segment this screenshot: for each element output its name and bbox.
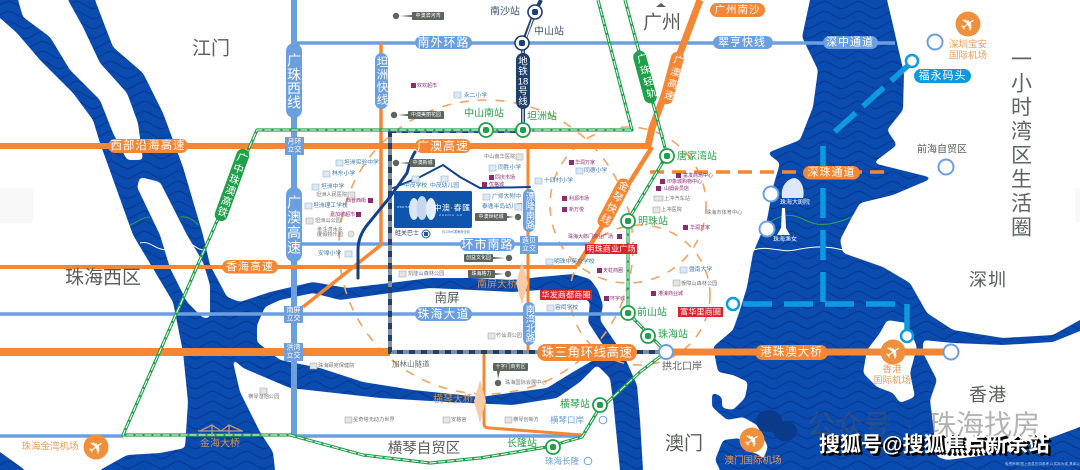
station labels: 中山站 <box>534 24 564 38</box>
grey POI labels: parks and hospitals: 坦洲山公园 <box>315 216 341 224</box>
purple POI labels: shopping: 山姆会员店 <box>664 185 689 192</box>
purple POI labels: shopping: 天虹商圈 <box>603 267 623 274</box>
interchange tags: 立交 <box>286 313 300 322</box>
bridge labels: 金海大桥 <box>200 436 240 450</box>
place name: hong kong: 香港 <box>969 385 1007 405</box>
blue POI labels: schools: 坦洲理工学校 <box>313 201 348 209</box>
interchange tags: 月环 <box>288 138 302 146</box>
interchange tags: 立交 <box>288 144 302 154</box>
station labels: 珠海长隆 <box>545 456 580 466</box>
place name: jiangmen: 江门 <box>192 38 230 60</box>
metro 18 pill: 线 <box>518 96 528 108</box>
blue POI labels: schools: 明珠中英文学校 <box>554 257 595 265</box>
station labels: 唐家湾站 <box>677 150 717 162</box>
place name: qianhai: 前海自贸区 <box>917 142 967 156</box>
grey POI icons <box>260 154 680 423</box>
interchange tags <box>284 137 538 361</box>
blue POI labels: schools: 同胜小学 <box>498 163 521 171</box>
project block: ZHONG AO <box>439 213 463 217</box>
shenzhen-zhuhai dashed link <box>650 170 890 174</box>
bridge labels <box>200 278 517 450</box>
bridge labels: 横琴大桥 <box>433 392 473 406</box>
wechat watermark icon <box>756 410 797 441</box>
road pills: orange <box>108 3 860 361</box>
station labels: 前山站 <box>637 306 667 318</box>
navy metro rail line <box>390 0 660 352</box>
grey POI labels: parks and hospitals: 上冲汽车站 <box>664 194 690 202</box>
grey POI labels: parks and hospitals: 横琴创新方 <box>513 415 539 423</box>
watermark: wechat account: 公众号 <box>807 410 891 440</box>
grey POI labels: parks and hospitals: 横琴湿地公园 <box>248 392 279 400</box>
grey POI labels: parks and hospitals: 竹仙洞公园 <box>496 331 522 339</box>
dark location tags: 十字门商务区 <box>495 363 526 370</box>
road pills: blue: 漂隆南路 <box>524 191 535 230</box>
road pills: blue: 珠海大道 <box>417 306 470 321</box>
blue POI labels: schools: 永二小学 <box>464 91 487 99</box>
blue POI labels: schools: 坦洲中学 <box>321 182 344 190</box>
shopping icons <box>356 83 688 301</box>
landmark: zhuhai grand theatre <box>780 178 810 206</box>
interchange tags: 造贝 <box>522 236 536 244</box>
grey POI labels: parks and hospitals <box>248 152 742 423</box>
place name: guangzhou <box>643 3 681 34</box>
place name: macau: 澳门 <box>665 432 703 454</box>
wavy rail and coast lines in water <box>130 215 852 251</box>
bridge labels: 南屏大桥 <box>477 278 517 290</box>
airports: 香港 <box>882 364 902 376</box>
cyan ring markers <box>727 55 918 342</box>
blue POI labels: schools: 中茂幼儿园 <box>430 181 459 189</box>
airports: ✈ <box>956 11 981 38</box>
metro 18 pill: 18 <box>518 76 528 88</box>
blue POI labels: schools: 中茂学校 <box>404 181 427 189</box>
station labels: 明珠站 <box>638 214 668 228</box>
bus stop label <box>395 229 470 238</box>
station glyphs green <box>483 127 670 450</box>
purple POI labels: shopping: 同庆市场 <box>495 174 515 181</box>
red commercial tags: 富华里商圈 <box>680 306 721 316</box>
purple POI labels: shopping: 利源市场 <box>569 195 589 202</box>
interchange tags: 立交 <box>286 350 300 360</box>
dark location tags: 中澳新城 <box>412 159 433 166</box>
project block: CHUN HUI <box>397 206 409 209</box>
station labels: 珠海站 <box>658 328 688 340</box>
grey POI labels: parks and hospitals: 凯隆山森林公园 <box>408 269 444 277</box>
road pills: orange: 西部沿海高速 <box>110 138 186 152</box>
dashed orange ring: tangjia <box>550 127 706 283</box>
road pills: blue: 深中通道 <box>826 34 874 48</box>
airports: ✈ <box>84 434 109 461</box>
diagonal pill: jinqin expressway: 金琴快线 <box>597 177 631 228</box>
blue POI labels: schools: 暨南大学 <box>689 265 712 273</box>
watermark: sohu shadow and text: 搜狐号@搜狐焦点新余站 <box>820 434 1051 458</box>
dark location tags: 创益文化园 <box>466 254 491 261</box>
watermark: wechat account: · <box>905 410 914 440</box>
bus stop label: 蛙关巴士 <box>395 229 419 237</box>
road pills: orange: 广澳高速 <box>417 138 469 153</box>
landmark: fisher girl statue <box>773 208 797 243</box>
airports: 国际机场 <box>949 50 987 62</box>
stations navy <box>515 5 542 50</box>
purple POI labels: shopping: 优格城 <box>489 181 504 188</box>
blue roads <box>0 0 895 436</box>
grey POI labels: parks and hospitals: 金斗湾水乡 <box>317 225 343 233</box>
blue POI labels: schools: 泰逸半岛幼儿园 <box>482 202 523 210</box>
interchange tags: 立交 <box>522 244 536 252</box>
watermark: sohu shadow and text: 搜狐号@搜狐焦点新余站 <box>822 435 1052 459</box>
purple POI labels: shopping: 新万悦 <box>569 206 584 213</box>
purple POI labels: shopping: 华润万家 <box>690 224 710 231</box>
dark location tags: 中澳世纪城 <box>478 213 504 220</box>
road pills: orange: 港珠澳大桥 <box>760 344 823 358</box>
airports: 澳门国际机场 <box>724 454 782 466</box>
dark location tags: 中澳美丽花园 <box>411 111 441 118</box>
dashed orange ring: community radius <box>339 100 633 394</box>
purple POI labels: shopping: 环宇城 <box>610 295 625 302</box>
purple POI labels: shopping: 珠海大郎门商业广场 <box>568 233 613 240</box>
place name: guangzhou: 广州 <box>643 12 681 34</box>
grey POI labels: parks and hospitals: 上冲医院 <box>661 205 683 213</box>
place name: hengqin: 横琴自贸区 <box>388 440 460 457</box>
purple POI labels: shopping: 港濠商业城 <box>658 290 683 297</box>
blue ring markers <box>584 34 958 465</box>
cyan dashed ferry and link lines <box>743 62 912 330</box>
blue POI labels: schools: 十四村小学 <box>544 176 573 184</box>
purple POI labels: shopping: 富发商场中心 <box>683 172 713 179</box>
grey POI labels: parks and hospitals: 星奇塔无动力世界 <box>353 415 395 423</box>
station labels: 横琴口岸 <box>550 415 585 425</box>
road pills: orange: 香海高速 <box>226 259 274 273</box>
fuyong wharf pill: 福永码头 <box>918 68 966 82</box>
purple POI labels: shopping: 西晋西街 <box>346 197 366 204</box>
dark location tags: 中澳滨河湾 <box>415 12 441 19</box>
landmark: zhuhai grand theatre: 珠海大剧院 <box>780 198 810 206</box>
road pills: blue: 南外环路 <box>417 34 470 50</box>
grey POI labels: parks and hospitals: 珠海国际会展中心 <box>505 378 547 386</box>
bridge: jinhai <box>198 425 243 435</box>
blue POI labels: schools: 同德小学 <box>584 166 607 174</box>
grey POI labels: parks and hospitals: 度假物乐园 <box>317 230 343 238</box>
diagonal pill: guangzhong zhuao high speed rail: 广中珠澳高铁 <box>215 151 249 219</box>
red commercial tags: 华发商都商圈 <box>541 290 591 300</box>
metro 18 pill: 铁 <box>518 66 528 78</box>
blue POI labels: schools: 安埠小学 <box>318 249 341 257</box>
airports: ✈ <box>740 427 765 454</box>
road pills: blue: 广澳高速 <box>286 195 302 255</box>
road pills: blue: 环市南路 <box>461 236 514 252</box>
landmark: fisher girl statue: 珠海渔女 <box>773 235 797 243</box>
station labels: 中山南站 <box>464 106 504 120</box>
station labels: 横琴站 <box>560 398 590 410</box>
place name: zhuhai west: 珠海西区 <box>65 266 141 288</box>
bus routes to project <box>358 152 530 278</box>
project block: 中澳·春匯 <box>433 202 471 212</box>
road pills: orange: 广州南沙 <box>714 3 760 16</box>
interchange tags: 南屏 <box>286 305 300 314</box>
metro 18 pill: 地 <box>518 56 528 68</box>
station labels: 长隆站 <box>507 436 537 450</box>
station labels: 坦洲站 <box>527 110 557 122</box>
bus stop label: 约13h㎡滨海商业街 <box>442 229 470 234</box>
red commercial tags <box>540 244 723 317</box>
red commercial tags: 明珠商业广场 <box>586 244 636 254</box>
station labels: 拱北口岸 <box>662 360 702 372</box>
blue POI labels: schools: 林东小学 <box>332 169 355 177</box>
fuyong wharf pill <box>914 68 971 83</box>
road pills: blue: 坦洲快线 <box>376 55 388 106</box>
road pills: orange: 深珠通道 <box>808 165 856 179</box>
airports: 深圳宝安 <box>949 38 987 50</box>
road pills: blue: 广珠西线 <box>286 53 302 109</box>
purple POI labels: shopping: 嘉加德超市 <box>330 211 355 218</box>
road pills: orange: 珠三角环线高速 <box>541 344 633 360</box>
place name: nanping: 南屏 <box>434 290 460 305</box>
light grey corner blocks <box>0 188 1080 223</box>
station labels: 南沙站 <box>490 4 520 18</box>
road pills: blue: 翠亨快线 <box>718 34 766 48</box>
green railways <box>123 0 667 463</box>
metro 18 pill: 号 <box>518 86 528 98</box>
station labels <box>464 4 717 466</box>
metro 18 pill <box>516 53 530 109</box>
grey POI labels: parks and hospitals: 中山南华医院 <box>484 152 516 160</box>
heading: one hour bay area living circle: 一小时湾区生活圈 <box>1008 48 1032 240</box>
grey POI labels: parks and hospitals: 安格宫 <box>451 415 467 423</box>
blue POI labels: schools: 坦洲实验中学 <box>344 158 379 166</box>
grey POI labels: parks and hospitals: 板障山森林公园 <box>681 279 717 287</box>
place name: shenzhen: 深圳 <box>969 270 1007 290</box>
bridge fans <box>474 262 528 423</box>
school icons <box>305 92 687 311</box>
diagonal pill: guangao expressway: 广澳高速 <box>660 53 685 103</box>
blue POI labels: schools: 广师大附中 <box>492 192 521 200</box>
dark location tags: 珠海格力 <box>471 270 492 277</box>
grey POI labels: parks and hospitals: 加林山隧道 <box>392 358 430 368</box>
dashed orange ring: qianshan <box>570 225 710 365</box>
watermark: wechat account: 珠海找房 <box>928 410 1040 440</box>
airports: 国际机场 <box>873 374 911 386</box>
diagonal pill: guangzhu light rail: 广珠轻轨 <box>633 52 657 102</box>
watermark: wechat account <box>807 410 1040 440</box>
interchange tags: 洪湾 <box>286 342 300 352</box>
purple POI labels: shopping: 欢欢超市 <box>417 82 437 89</box>
grey POI labels: parks and hospitals: 坦洲人民医院 <box>316 190 348 198</box>
grey POI labels: parks and hospitals: 珠海颐宛保健院 <box>318 361 355 369</box>
blue POI labels: schools: 容闳学校 <box>555 303 578 311</box>
purple POI labels: shopping <box>330 82 713 302</box>
road pills: blue <box>286 34 878 345</box>
stations green <box>479 123 674 454</box>
dark location tags <box>391 12 528 386</box>
airports: 珠海金湾机场 <box>21 440 79 452</box>
blue POI labels: schools <box>313 91 712 311</box>
grey POI labels: parks and hospitals: 珠海市体育中心 <box>706 208 742 216</box>
purple POI labels: shopping: 印象城购物中心 <box>667 178 702 185</box>
airports: ✈ <box>881 339 906 366</box>
purple POI labels: shopping: 华润万家 <box>575 159 595 166</box>
project block <box>394 191 472 228</box>
road pills: blue: 南湾北路 <box>524 304 535 343</box>
watermark: sohu shadow and text: 搜狐号@搜狐焦点新余站 <box>819 432 1049 456</box>
